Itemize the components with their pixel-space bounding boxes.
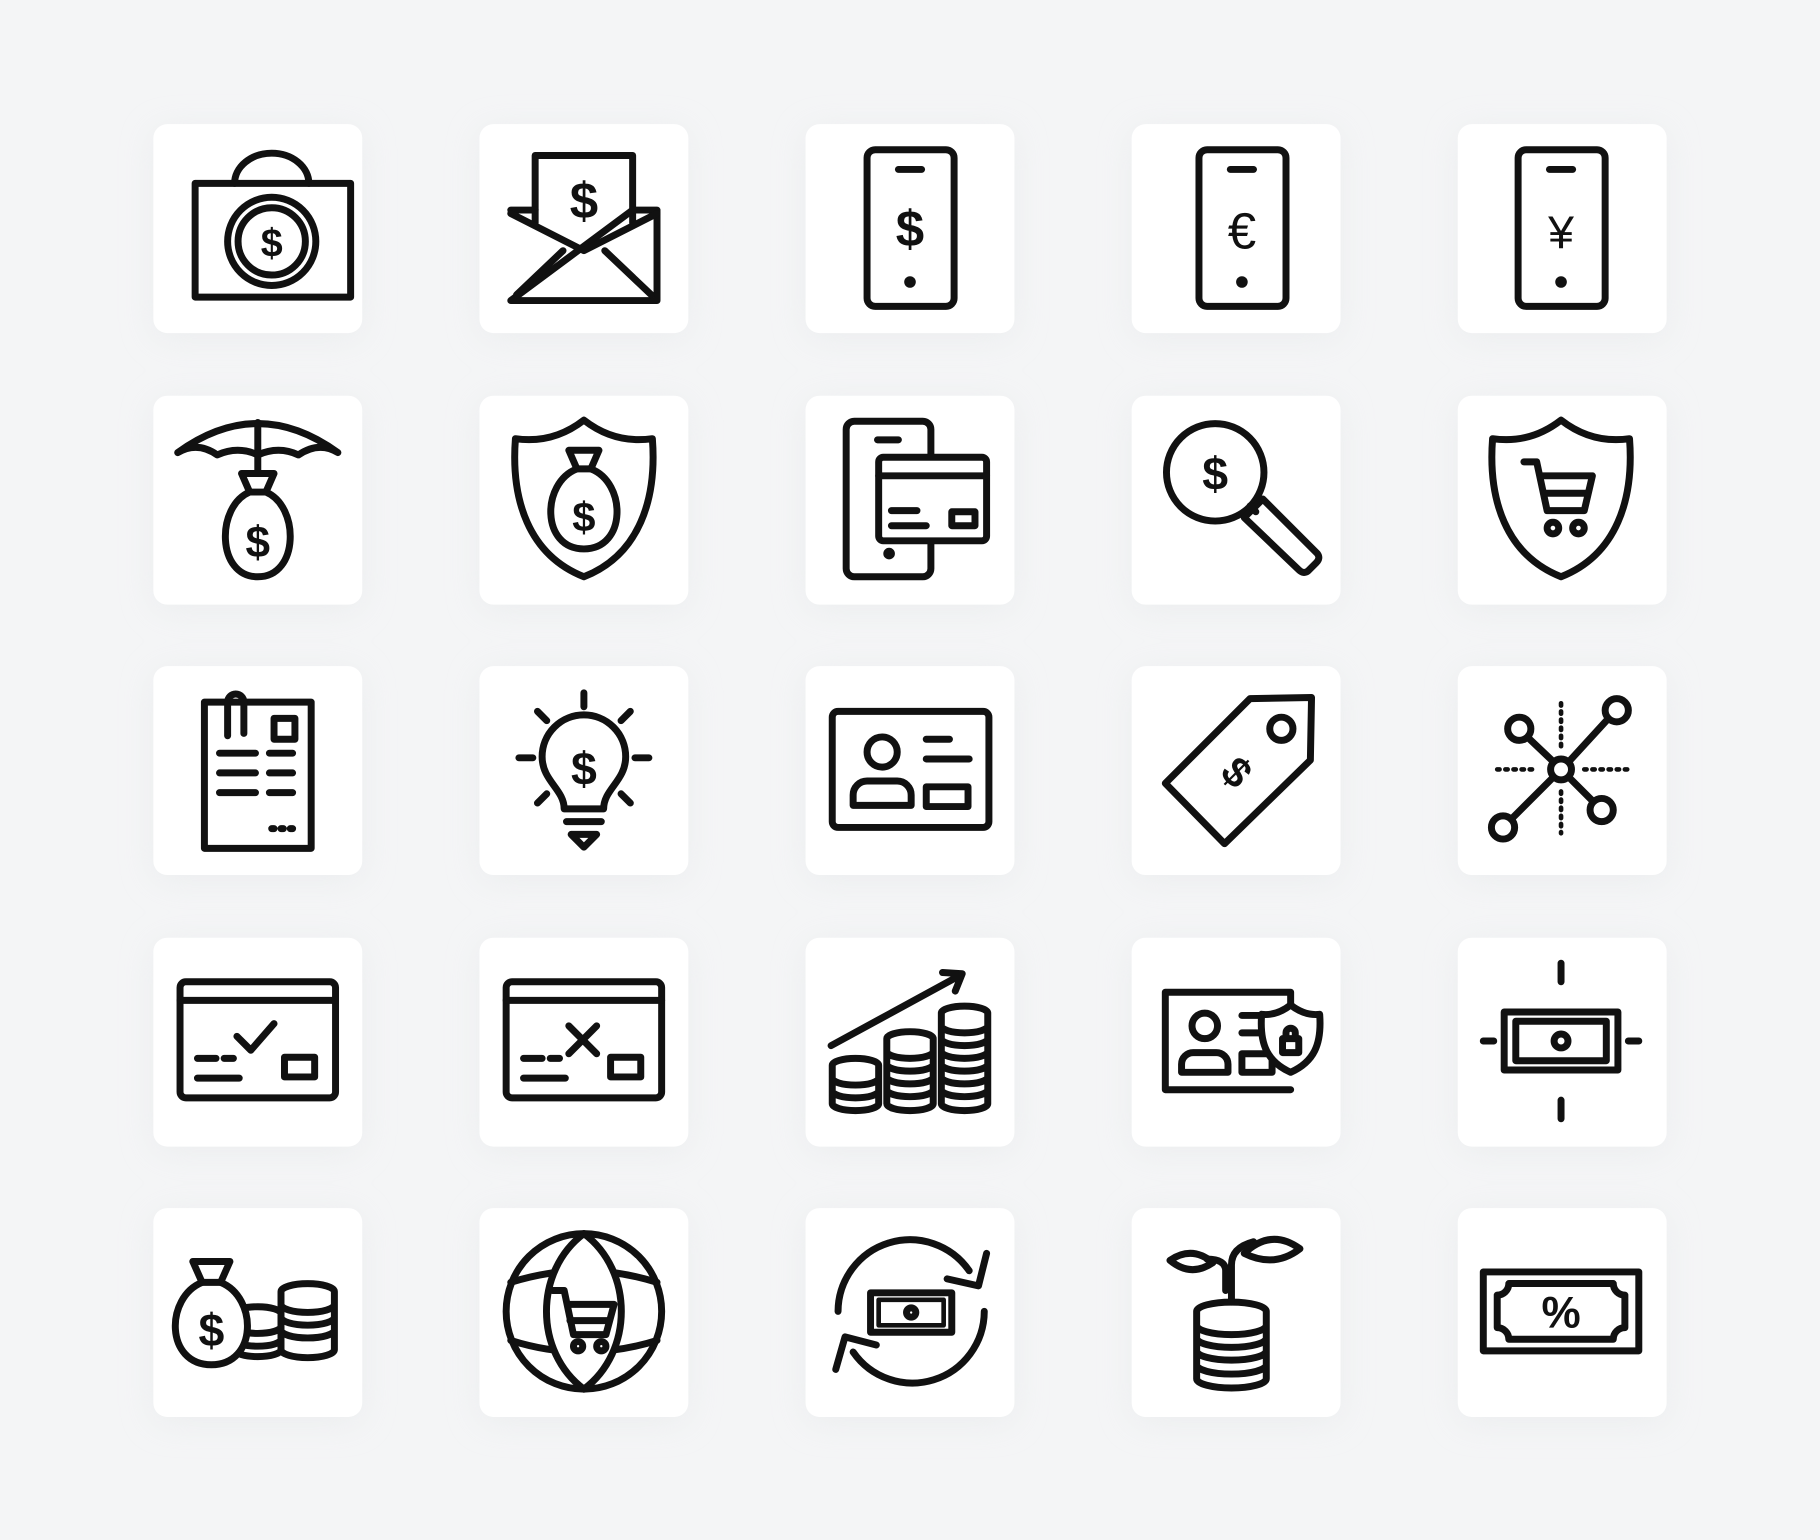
icon: phone euro: € [1228,202,1256,259]
icon: phone and card [846,421,987,577]
icon: plant on coins [1170,1239,1300,1388]
icon: money exchange cycle [836,1240,987,1383]
icon: shield money bag: $ [572,494,596,541]
icon: secured id [1165,992,1320,1090]
icon: global shopping [506,1234,662,1389]
icon: banknote percent [1483,1272,1639,1351]
icon: money bag and coins [175,1261,334,1365]
icon: umbrella money bag: $ [246,518,270,567]
icon: phone euro [1199,150,1286,306]
icon: banknote crosshair [1483,963,1639,1119]
icon: envelope with money [511,156,657,301]
icon: briefcase with coin [195,153,351,297]
icon: light bulb dollar [519,693,649,847]
icon: envelope with money: $ [570,172,598,229]
icon: clipboard document [204,694,311,848]
icon: light bulb dollar: $ [571,743,597,795]
icon: price tag: $ [1212,747,1262,797]
icon: magnifier dollar: $ [1202,448,1228,500]
icon: card approved [180,982,336,1098]
icon: magnifier dollar [1166,424,1319,572]
icon: shield cart [1492,420,1630,577]
icon: shield money bag [515,420,653,577]
icon: phone yen: ¥ [1547,206,1574,258]
icon: price tag [1165,697,1312,844]
icon: card declined [506,982,662,1098]
icon: umbrella money bag [178,422,338,577]
icon: phone yen [1518,150,1605,306]
tile grid [153,124,1667,1423]
icon: coins growth [831,973,988,1111]
icon: banknote percent: % [1541,1289,1581,1338]
icon: briefcase with coin: $ [261,221,283,265]
icon: phone dollar: $ [896,200,924,257]
icon: money bag and coins: $ [198,1304,224,1356]
icon: id card [832,711,989,827]
icon: network nodes [1491,699,1628,839]
icon: phone dollar [867,150,954,306]
